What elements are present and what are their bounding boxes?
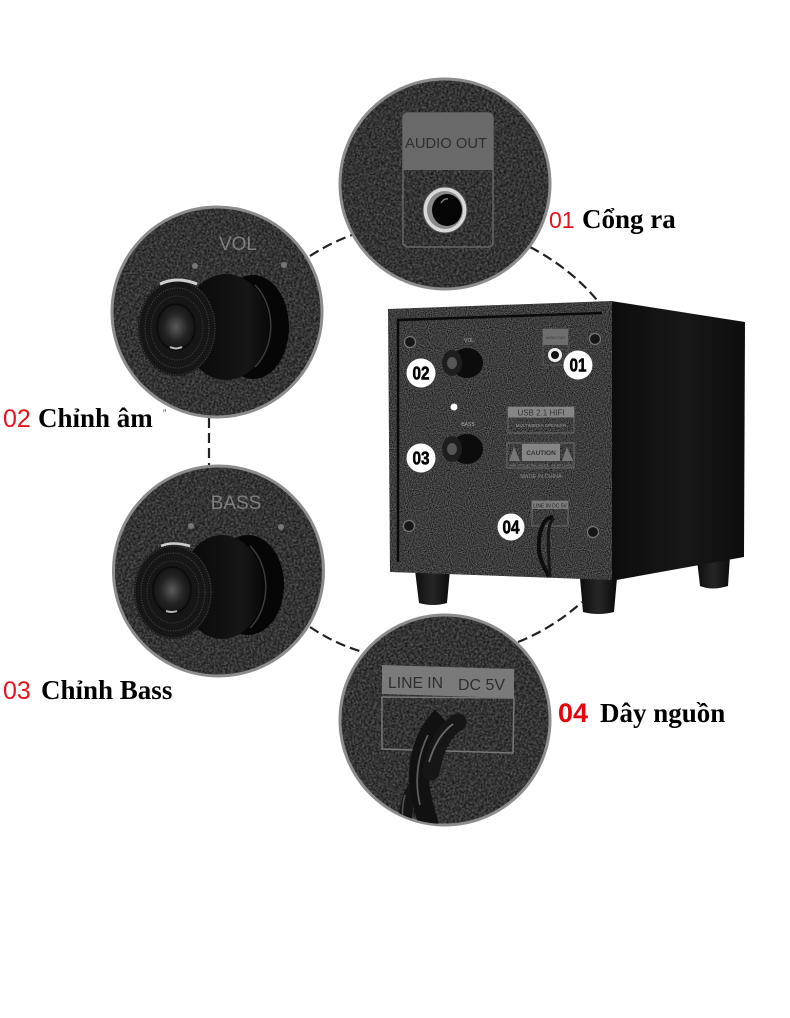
line in plate: DC 5V	[458, 677, 505, 694]
USB label plate	[508, 407, 574, 433]
USB label plate: MULTIMEDIA SPEAKER	[516, 423, 567, 428]
speaker front frame	[388, 301, 612, 580]
caution label plate: MADE IN CHINA	[520, 474, 562, 480]
caution label plate: CAUTION	[526, 450, 556, 457]
bass knob, small	[442, 422, 483, 464]
volume knob, small: VOL	[464, 338, 474, 344]
volume knob	[138, 274, 289, 380]
badge 03	[406, 444, 436, 472]
speaker inner panel	[398, 313, 602, 572]
status LED	[450, 404, 458, 410]
badge 02: 02	[412, 362, 430, 384]
detail circle 03: bass knob	[114, 466, 324, 676]
caution label plate	[507, 443, 574, 480]
dashed connector ring	[209, 235, 597, 652]
caution label plate: RISK OF ELECTRIC SHOCK · DO NOT OPEN	[510, 464, 572, 468]
badge 01: 01	[570, 354, 586, 376]
badge 03: 03	[412, 448, 430, 468]
detail circle 02: volume knob	[112, 207, 322, 417]
label 01: 01	[549, 207, 575, 233]
power cable	[402, 717, 458, 826]
detail circle 04: power cable	[340, 615, 550, 826]
volume knob, small	[442, 338, 483, 378]
badge 04: 04	[502, 516, 520, 538]
badge 01	[564, 350, 592, 380]
audio jack	[423, 187, 467, 233]
line in plate and cable	[532, 501, 568, 577]
detail circle 03: bass knob: BASS	[211, 493, 261, 514]
label 02: ″	[163, 408, 167, 418]
speaker side panel	[611, 301, 745, 581]
audio out port, small: AUDIO OUT	[546, 336, 566, 340]
label 04: Dây nguồn	[600, 698, 725, 728]
label 03: 03	[3, 677, 31, 705]
USB label plate: USB 2.1 HIFI	[517, 408, 565, 418]
label 02	[3, 403, 167, 433]
bass knob, small: BASS	[461, 422, 475, 428]
label 03: Chỉnh Bass	[41, 675, 172, 705]
detail circle 01: audio out	[340, 79, 550, 289]
bass knob	[134, 535, 284, 639]
line in plate and cable: LINE IN DC 5V	[533, 504, 567, 510]
audio out plate	[403, 113, 493, 247]
panel screws	[404, 334, 600, 538]
badge 02	[406, 358, 436, 388]
line in plate	[382, 665, 514, 753]
detail circle 02: volume knob: VOL	[219, 234, 257, 255]
label 02: 02	[3, 405, 31, 433]
label 04: 04	[558, 698, 588, 728]
label 01: Cổng ra	[582, 204, 676, 234]
badge 04	[498, 514, 524, 540]
audio out plate: AUDIO OUT	[405, 136, 487, 152]
speaker unit	[388, 301, 745, 614]
speaker feet	[415, 556, 730, 614]
audio out port, small	[543, 329, 568, 365]
line in plate: LINE IN	[388, 675, 443, 692]
label 02: Chỉnh âm	[38, 403, 153, 433]
